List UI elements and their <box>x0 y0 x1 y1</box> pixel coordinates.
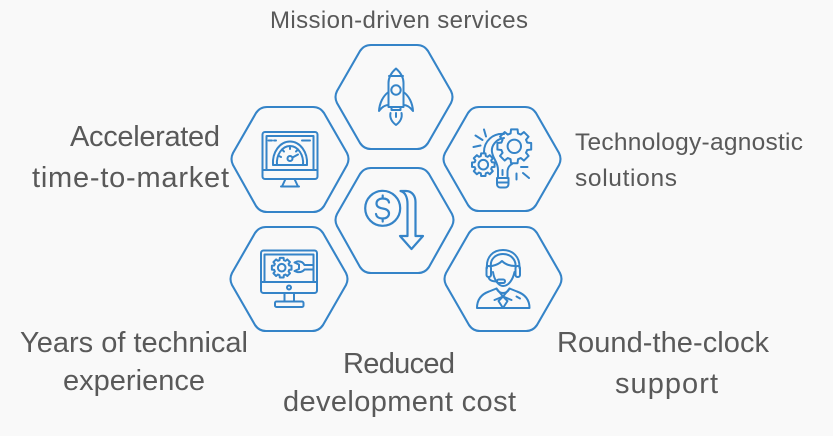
icon: rocket <box>379 68 413 125</box>
hexagon outline top <box>336 45 452 149</box>
text: reduced development cost <box>283 348 516 418</box>
text: technology-agnostic solutions: Technology-agnostic <box>575 129 803 156</box>
hexagon outline upper right <box>444 107 560 211</box>
panel: mission-driven services <box>270 7 528 149</box>
text: accelerated time-to-market: time-to-market <box>32 162 229 194</box>
panel: years of technical experience <box>20 227 348 397</box>
panel: reduced development cost <box>283 168 516 418</box>
text: years of technical experience: experience <box>63 365 205 397</box>
panel: round-the-clock support <box>444 227 770 400</box>
text: round-the-clock support <box>557 327 770 400</box>
text: years of technical experience <box>20 327 248 397</box>
icon: support agent with headset <box>477 250 530 308</box>
icon: monitor with gear and wrench <box>261 250 317 307</box>
icon: speedometer monitor <box>262 132 318 186</box>
hexagon outline lower right <box>444 227 562 331</box>
panel: accelerated time-to-market <box>32 107 348 212</box>
text: reduced development cost: development cost <box>283 386 516 418</box>
text: reduced development cost: Reduced <box>343 348 455 380</box>
text: years of technical experience: Years of technical <box>20 327 248 359</box>
text: round-the-clock support: Round-the-clock <box>557 327 770 359</box>
text: round-the-clock support: support <box>615 368 718 400</box>
icon: light bulb with gears <box>472 129 531 188</box>
text: accelerated time-to-market: Accelerated <box>70 121 220 153</box>
hexagon outline centre <box>336 168 454 273</box>
text: technology-agnostic solutions <box>575 129 803 192</box>
hexagon outline lower left <box>230 227 348 331</box>
text: technology-agnostic solutions: solutions <box>575 165 677 192</box>
panel: technology-agnostic solutions <box>444 107 803 211</box>
hexagon outline upper left <box>232 107 348 212</box>
heading: mission-driven services: Mission-driven services <box>270 7 528 34</box>
text: accelerated time-to-market <box>32 121 229 194</box>
icon: dollar with down arrow <box>365 191 423 249</box>
